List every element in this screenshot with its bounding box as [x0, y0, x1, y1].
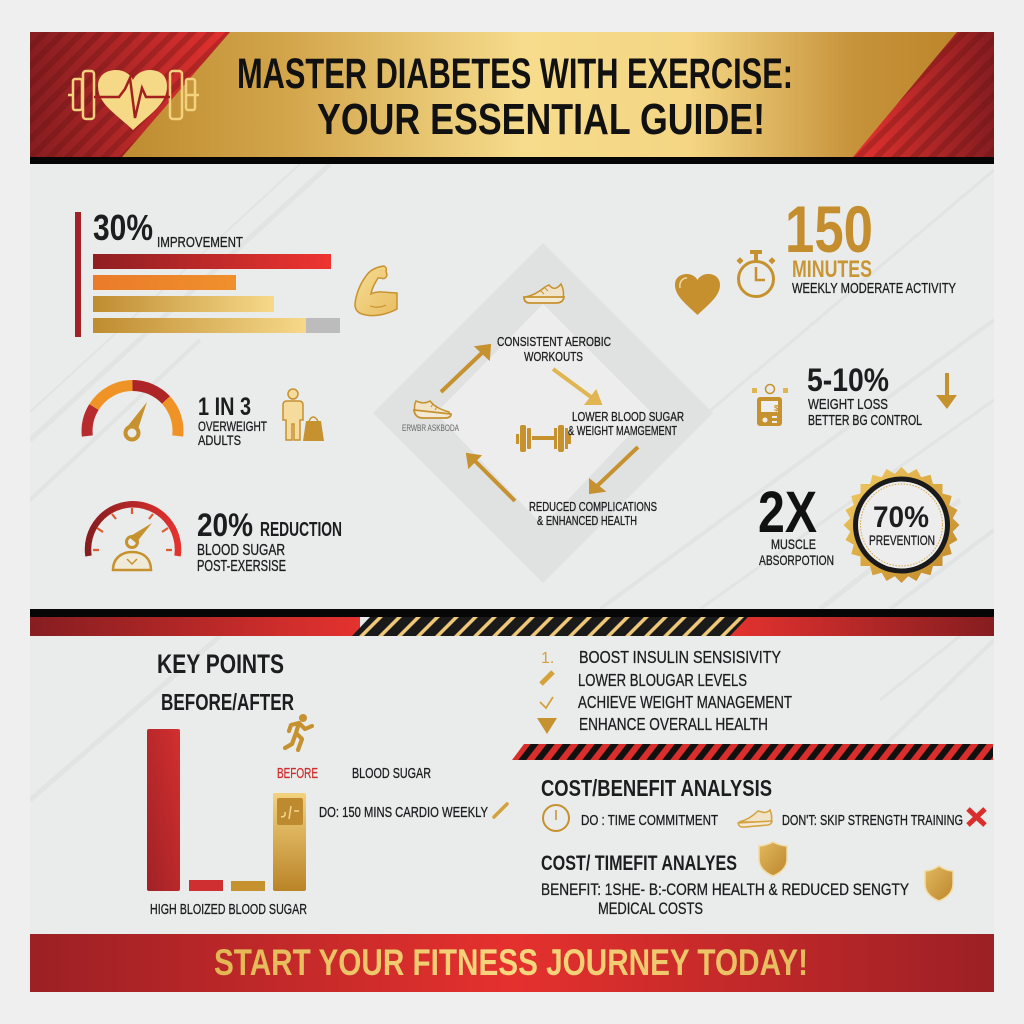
icon: flexed arm	[355, 266, 397, 316]
cycle diagram diamond	[373, 243, 713, 583]
stat: 5-10% weight loss: WEIGHT LOSS	[808, 396, 888, 413]
icon: check	[540, 697, 553, 708]
node: consistent aerobic workouts: CONSISTENT AEROBIC	[497, 334, 611, 349]
node: lower blood sugar	[568, 409, 684, 438]
stat: 30% improvement bars	[75, 207, 340, 337]
node: reduced complications	[529, 499, 657, 528]
icon: gauge	[87, 385, 178, 440]
stat: 150 minutes: MINUTES	[792, 256, 872, 283]
icon: stopwatch	[736, 250, 776, 296]
arrow: down right	[553, 369, 601, 404]
icon: red x	[968, 809, 985, 825]
stat: 2X muscle absorption	[758, 480, 834, 568]
stat: 20% reduction gauge: 20%	[197, 507, 253, 543]
icon: runner	[285, 714, 312, 750]
stat: 20% reduction gauge	[88, 504, 342, 575]
text: do time commitment: DO : TIME COMMITMENT	[581, 813, 718, 829]
stat: 30% improvement bars: 30%	[93, 207, 153, 248]
node: consistent aerobic workouts	[497, 334, 611, 364]
label: before: BEFORE	[277, 765, 318, 782]
stat: 150 minutes: 150	[785, 192, 873, 266]
text: benefit: MEDICAL COSTS	[598, 900, 703, 918]
key points list: ACHIEVE WEIGHT MANAGEMENT	[578, 692, 792, 712]
title: YOUR ESSENTIAL GUIDE!	[317, 95, 765, 144]
before/after bar chart: HIGH BLOIZED BLOOD SUGAR	[150, 901, 307, 918]
key points heading: KEY POINTS	[157, 649, 284, 679]
label: blood sugar: BLOOD SUGAR	[352, 765, 431, 782]
icon: clock	[543, 805, 569, 831]
title: MASTER DIABETES WITH EXERCISE:	[237, 50, 793, 98]
icon: down triangle	[537, 718, 557, 734]
icon: pencil	[541, 672, 553, 684]
stat: 150 minutes: WEEKLY MODERATE ACTIVITY	[792, 280, 956, 297]
stat: 5-10% weight loss: 5-10%	[807, 362, 889, 398]
icon: shoe	[738, 810, 772, 827]
badge: 70% prevention seal: 70%	[873, 501, 929, 534]
stat: 20% reduction gauge: BLOOD SUGAR	[197, 542, 285, 559]
title	[237, 50, 793, 144]
icon: shoe top	[524, 284, 564, 303]
stat: 30% improvement bars: IMPROVEMENT	[157, 234, 243, 251]
stat: 20% reduction gauge: POST-EXERSISE	[197, 558, 286, 575]
node: reduced complications: & ENHANCED HEALTH	[537, 513, 637, 528]
key points list	[537, 647, 792, 734]
stat: 1 in 3 gauge: OVERWEIGHT	[198, 418, 267, 434]
badge: 70% prevention seal	[844, 467, 960, 583]
node: small caption: ERWBR ASKBODA	[402, 423, 459, 433]
text: do 150 mins cardio: DO: 150 MINS CARDIO WEEKLY	[319, 804, 488, 821]
key points list: 1.	[541, 650, 554, 667]
cost/timefit heading: COST/ TIMEFIT ANALYES	[541, 852, 737, 875]
stat: 1 in 3 gauge: 1 IN 3	[198, 393, 251, 421]
stat: 20% reduction gauge: REDUCTION	[260, 519, 342, 541]
stat: 2X muscle absorption: ABSORPOTION	[759, 552, 834, 568]
node: lower blood sugar: LOWER BLOOD SUGAR	[572, 409, 684, 424]
divider band	[30, 609, 994, 636]
before/after heading: BEFORE/AFTER	[161, 689, 294, 715]
text: benefit: BENEFIT: 1SHE- B:-CORM HEALTH & REDUCED SENGTY	[541, 881, 909, 899]
icon: shoe left	[414, 401, 451, 418]
node: lower blood sugar: & WEIGHT MAMGEMENT	[568, 423, 677, 438]
icon: glucose monitor	[752, 384, 788, 426]
stat: 1 in 3 gauge: ADULTS	[198, 432, 241, 448]
stat: 5-10% weight loss	[752, 362, 957, 429]
arrow: up left	[467, 454, 515, 501]
icon: dumbbell	[516, 425, 571, 452]
icon: gauge with person	[88, 504, 178, 570]
icon: shield	[925, 866, 953, 901]
before/after bar chart	[147, 729, 307, 918]
arrow: up right	[441, 345, 490, 392]
header banner	[30, 32, 994, 164]
stat: 2X muscle absorption: MUSCLE	[771, 536, 816, 552]
badge: 70% prevention seal: PREVENTION	[869, 532, 935, 548]
stat: 5-10% weight loss: BETTER BG CONTROL	[808, 412, 922, 429]
footer call to action: START YOUR FITNESS JOURNEY TODAY!	[214, 942, 808, 983]
stat: 150 minutes	[785, 192, 956, 297]
node: consistent aerobic workouts: WORKOUTS	[524, 349, 583, 364]
icon: shield	[759, 842, 787, 876]
key points list: ENHANCE OVERALL HEALTH	[579, 714, 768, 734]
arrow: down left	[590, 447, 638, 493]
arrow: down	[936, 373, 957, 409]
stat: 1 in 3 gauge	[87, 385, 324, 448]
icon: heart	[675, 274, 720, 315]
node: reduced complications: REDUCED COMPLICATIONS	[529, 499, 657, 514]
stat: 2X muscle absorption: 2X	[758, 480, 817, 545]
cost/benefit heading: COST/BENEFIT ANALYSIS	[541, 775, 772, 801]
text: benefit	[541, 881, 909, 918]
icon: heart with dumbbell	[68, 70, 199, 130]
key points list: LOWER BLOUGAR LEVELS	[578, 670, 747, 690]
icon: person and bag	[283, 389, 324, 441]
text: don't skip strength training: DON'T: SKIP STRENGTH TRAINING	[782, 813, 963, 829]
icon: bone	[494, 804, 507, 817]
striped divider	[512, 744, 993, 760]
bar chart	[93, 254, 340, 333]
footer call to action	[30, 934, 994, 992]
key points list: BOOST INSULIN SENSISIVITY	[579, 647, 781, 667]
icon: glucose monitor: $	[774, 404, 779, 413]
